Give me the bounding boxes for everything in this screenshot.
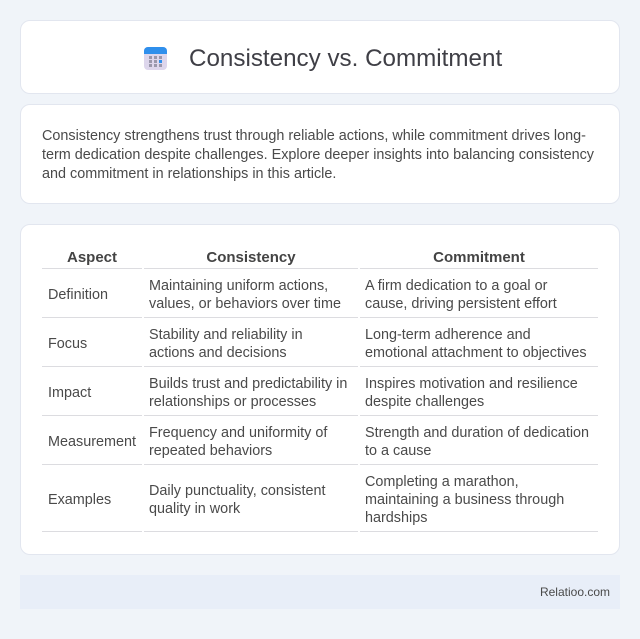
row: examples — [48, 474, 564, 526]
row: definition — [48, 278, 557, 312]
row: impact: despite challenges — [365, 394, 484, 410]
row: measurement: repeated behaviors — [149, 443, 272, 459]
panel: header — [20, 20, 620, 94]
row: focus: Stability and reliability in — [149, 327, 303, 343]
row: examples: Completing a marathon, — [365, 474, 519, 490]
row: focus: Focus — [48, 336, 87, 352]
table — [42, 249, 598, 532]
intro text: term dedication despite challenges. Explore deeper insights into balancing consistency — [42, 147, 594, 163]
table header: Aspect — [67, 249, 117, 266]
footer credit: Relatioo.com — [540, 585, 610, 599]
row: measurement: Frequency and uniformity of — [149, 425, 327, 441]
table header — [67, 249, 525, 266]
row: impact — [48, 376, 578, 410]
row: examples: Daily punctuality, consistent — [149, 483, 326, 499]
row: measurement — [48, 425, 589, 459]
row: measurement: Measurement — [48, 434, 136, 450]
row: examples: quality in work — [149, 501, 240, 517]
row: definition: cause, driving persistent effort — [365, 296, 557, 312]
panel: introduction — [20, 104, 620, 204]
row: definition: Definition — [48, 287, 108, 303]
row: impact: relationships or processes — [149, 394, 316, 410]
row: impact: Impact — [48, 385, 91, 401]
row: examples: Examples — [48, 492, 111, 508]
row: focus: Long-term adherence and — [365, 327, 531, 343]
footer — [20, 575, 620, 609]
row: definition: values, or behaviors over time — [149, 296, 341, 312]
row: focus: actions and decisions — [149, 345, 287, 361]
panel: comparison table — [20, 224, 620, 555]
row: measurement: to a cause — [365, 443, 431, 459]
row: impact: Inspires motivation and resilience — [365, 376, 578, 392]
row: definition: A firm dedication to a goal or — [365, 278, 547, 294]
row: measurement: Strength and duration of dedication — [365, 425, 589, 441]
intro text: and commitment in relationships in this article. — [42, 166, 336, 182]
intro text: Consistency strengthens trust through reliable actions, while commitment drives long- — [42, 128, 586, 144]
intro text — [42, 128, 594, 182]
icon: calendar — [144, 47, 167, 70]
row: focus — [48, 327, 587, 361]
title: Consistency vs. Commitment — [189, 45, 502, 72]
table header: Consistency — [206, 249, 296, 266]
row: impact: Builds trust and predictability in — [149, 376, 347, 392]
row: focus: emotional attachment to objectives — [365, 345, 587, 361]
row: definition: Maintaining uniform actions, — [149, 278, 328, 294]
row: examples: hardships — [365, 510, 427, 526]
table header: Commitment — [433, 249, 525, 266]
row: examples: maintaining a business through — [365, 492, 564, 508]
